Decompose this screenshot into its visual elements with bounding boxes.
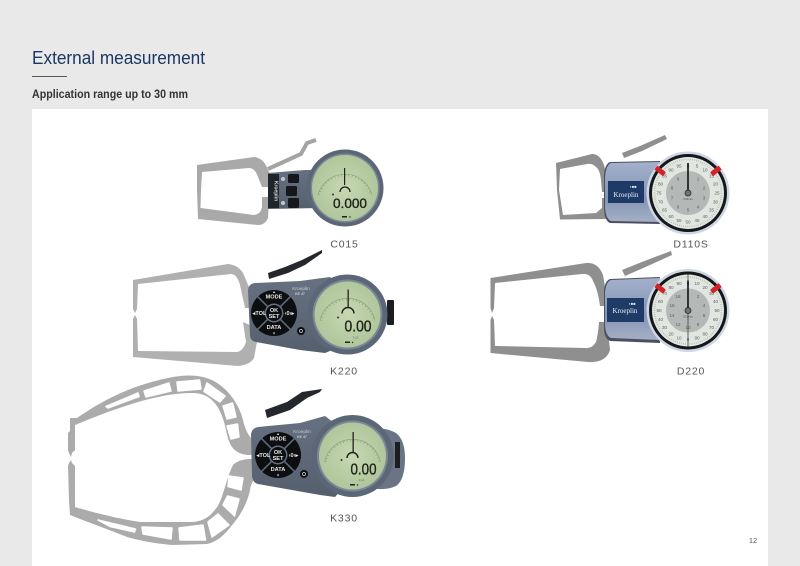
C015 lever	[268, 140, 316, 169]
K220 small button	[297, 327, 305, 335]
D220 dial	[646, 269, 730, 352]
D110S dial: 80	[658, 182, 663, 186]
C015 brand strip: Kroeplin	[272, 181, 278, 201]
D110S dial: 35	[709, 208, 714, 212]
K330 lever	[265, 389, 322, 418]
D110S brand label	[608, 181, 644, 203]
D220 dial: 10	[676, 336, 682, 340]
C015 brand strip	[268, 174, 279, 208]
K220 dial: 0.00	[344, 318, 372, 336]
D220 brand label	[607, 298, 644, 322]
D220 dial: 80	[668, 285, 674, 290]
K330 keypad: ▲	[276, 432, 280, 436]
D110S dial: 45	[694, 218, 700, 223]
K220 brand: KE 47	[295, 292, 305, 296]
K220 body	[248, 277, 345, 353]
K330 jaw cut-outs	[98, 380, 243, 540]
D220 dial: 0	[687, 281, 690, 286]
D220 jaws	[490, 263, 610, 362]
C015 dial	[306, 150, 384, 226]
D220 dial: 40	[713, 299, 718, 304]
D110S dial: 2	[703, 186, 706, 190]
D220 body	[604, 277, 660, 343]
D110S dial: 6	[677, 204, 680, 210]
D110S dial: 60	[668, 214, 674, 219]
D220 dial: 50	[714, 308, 720, 313]
D110S dial	[646, 152, 730, 234]
K220 lever	[268, 250, 322, 279]
subtitle: Application range up to 30 mm	[32, 87, 188, 101]
D110S dial: 5	[696, 164, 699, 168]
K330 dial: 2-10	[359, 478, 365, 482]
K330 body	[251, 416, 350, 497]
D110S dial: 8	[671, 186, 674, 190]
C015 body	[268, 170, 320, 209]
K220 dial	[308, 274, 388, 354]
C015 buttons	[281, 174, 299, 208]
K220 back tab	[387, 300, 394, 325]
D220 dial: 40	[658, 317, 663, 322]
D220 dial: 4	[703, 303, 706, 308]
K330 brand: Kroeplin	[293, 429, 311, 435]
label D220: D220	[677, 366, 705, 378]
D110S dial: 85	[662, 174, 667, 178]
D110S lever	[622, 135, 667, 158]
D220 dial: 0.02mm	[683, 314, 693, 318]
K330 dial: 0.00	[350, 462, 377, 478]
K220 keypad: ▲	[272, 290, 276, 294]
label K330: K330	[330, 512, 358, 524]
gauge K220	[133, 250, 394, 366]
D110S dial: 9	[677, 176, 680, 182]
K220 dial: 2-10	[353, 336, 359, 340]
D220 dial: 70	[662, 291, 667, 296]
D110S dial: 55	[676, 218, 682, 223]
D220 dial: 10	[685, 325, 691, 330]
K330 jaws	[68, 376, 256, 545]
D220 dial: 90	[694, 336, 700, 340]
D110S brand label: ◖■■	[629, 184, 637, 189]
D110S dial: 70	[658, 200, 663, 204]
K330 brand	[293, 429, 311, 439]
K220 keypad: ◂TOL	[252, 311, 267, 317]
K220 jaws	[133, 264, 257, 366]
K330 dial	[312, 415, 394, 497]
D220 lever	[622, 251, 672, 276]
D220 dial: 14	[669, 313, 675, 318]
D220 dial: 70	[709, 325, 714, 330]
K220 keypad: ▼	[272, 332, 276, 336]
K330 keypad: ‹0›▸	[289, 453, 300, 459]
D110S dial: 4	[697, 204, 700, 210]
D110S dial: 0	[687, 164, 690, 168]
K220 brand	[292, 286, 310, 296]
D110S dial: 30	[713, 200, 718, 204]
D110S body	[604, 161, 660, 224]
D110S dial: 40	[702, 214, 708, 219]
D110S dial: 65	[662, 208, 667, 212]
label C015: C015	[330, 238, 359, 250]
D110S dial: 3	[703, 196, 706, 200]
D110S dial: 5	[687, 208, 690, 212]
K330 keypad: OK	[274, 450, 282, 456]
K330 keypad: ◂TOL	[256, 453, 271, 459]
D110S dial: 7	[671, 196, 674, 200]
D220 dial: 18	[675, 294, 681, 299]
K330 back housing	[370, 428, 405, 489]
K220 keypad: MODE	[266, 294, 283, 300]
page number: 12	[749, 536, 757, 545]
D220 dial: 2	[697, 294, 700, 299]
D220 dial: 60	[713, 317, 718, 322]
D220 dial: 30	[662, 325, 667, 330]
K220 keypad: SET	[269, 314, 280, 320]
D220 brand label: Kroeplin	[613, 307, 638, 315]
D220 dial: 6	[703, 313, 706, 318]
D110S dial: 95	[676, 164, 682, 168]
C015 dial: 0.000	[333, 196, 367, 211]
D110S dial: 1	[697, 176, 700, 182]
D110S dial: 0.01mm	[683, 197, 693, 201]
D110S dial: 10	[702, 168, 708, 172]
D110S dial: 25	[714, 190, 720, 196]
D220 dial: 12	[675, 322, 681, 327]
D110S dial: 90	[668, 168, 674, 172]
K220 keypad	[251, 290, 297, 336]
K330 keypad: DATA	[271, 467, 285, 473]
K330 keypad	[255, 432, 301, 478]
D110S dial: 75	[656, 190, 662, 196]
panel: white content area	[32, 109, 768, 566]
label D110S: D110S	[673, 238, 709, 250]
D110S dial: 20	[713, 182, 718, 186]
gauge D220	[490, 251, 730, 362]
D110S dial: 50	[685, 220, 691, 224]
D220 dial: 8	[697, 322, 700, 327]
K330 keypad: SET	[273, 456, 284, 462]
D220 brand label: ◖■■	[628, 301, 636, 306]
gauge C015	[197, 140, 384, 226]
D220 dial: 0	[687, 337, 690, 342]
label K220: K220	[330, 366, 358, 378]
K220 keypad: DATA	[267, 325, 281, 331]
D220 dial: 30	[709, 291, 714, 296]
K330 keypad: ▼	[276, 474, 280, 478]
D110S dial: 15	[709, 174, 714, 178]
K220 keypad: ‹0›▸	[285, 311, 296, 317]
K330 brand: KE 47	[297, 435, 307, 439]
C015 jaws	[197, 157, 272, 225]
D220 dial: 16	[669, 303, 675, 308]
K220 brand: Kroeplin	[292, 286, 310, 292]
K220 keypad: OK	[270, 308, 278, 314]
title: External measurement	[32, 47, 205, 68]
D220 dial: 50	[656, 308, 662, 313]
D220 dial: 20	[668, 332, 674, 336]
K330 keypad: MODE	[270, 436, 287, 442]
D110S jaws	[556, 154, 608, 220]
D220 dial: 80	[702, 332, 708, 336]
D220 dial: 60	[658, 299, 663, 304]
gauge K330	[68, 376, 405, 545]
K330 small button	[300, 470, 308, 478]
D220 dial: 10	[694, 281, 700, 286]
D220 dial: 90	[676, 281, 682, 286]
gauge D110S	[556, 135, 730, 234]
D220 dial: 20	[702, 285, 708, 290]
D110S brand label: Kroeplin	[614, 191, 639, 199]
